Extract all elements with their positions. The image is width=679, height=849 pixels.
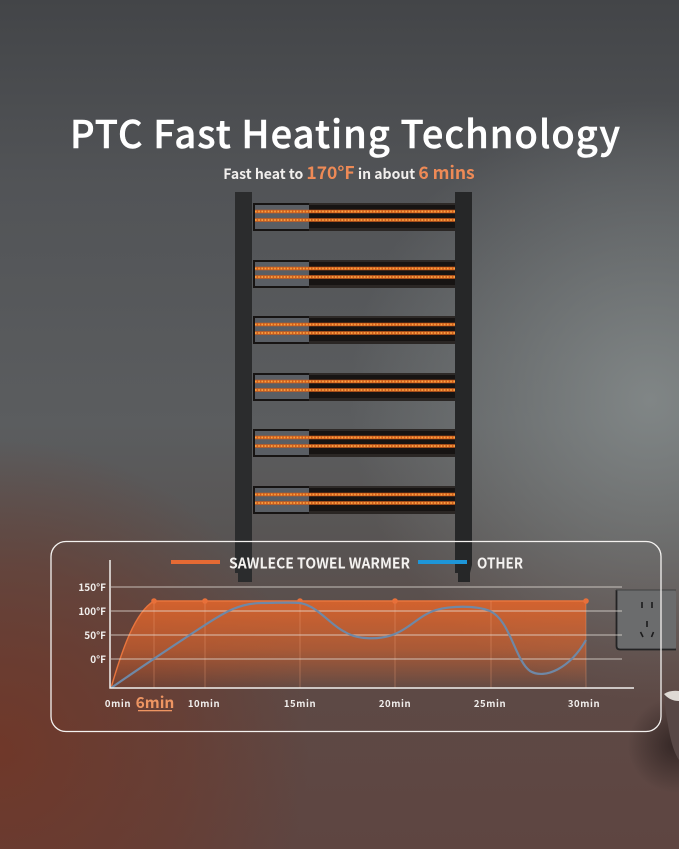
y axis labels: 0°F — [90, 651, 106, 666]
axes — [110, 560, 634, 688]
legend: other — [418, 552, 523, 574]
x axis labels: 30min — [568, 696, 600, 710]
blue line: other — [111, 603, 586, 688]
heated bar 4 — [253, 373, 455, 401]
heated bar 5 — [253, 429, 455, 457]
heated bar 3 — [253, 316, 455, 344]
legend: other: OTHER — [477, 552, 523, 574]
y axis labels: 50°F — [84, 627, 106, 642]
y axis labels — [78, 579, 106, 666]
x axis labels: 10min — [188, 696, 220, 710]
legend: sawlece towel warmer: SAWLECE TOWEL WARMER — [229, 552, 410, 574]
y axis labels: 100°F — [78, 603, 106, 618]
line chart — [78, 560, 634, 713]
x axis labels: 0min — [105, 696, 131, 710]
6min highlight: 6min — [136, 691, 174, 713]
icon: wall socket — [616, 590, 676, 650]
orange area — [111, 601, 586, 688]
heated bar 1 — [253, 203, 455, 231]
heated bar 6 — [253, 486, 455, 514]
y axis labels: 150°F — [78, 579, 106, 594]
grid lines — [111, 587, 622, 659]
icon: cup edge — [664, 691, 679, 760]
x axis labels: 15min — [284, 696, 316, 710]
towel warmer rack — [235, 192, 472, 582]
vertical guides — [154, 601, 586, 688]
subtitle: Fast heat to 170°F in about 6 mins — [223, 160, 475, 185]
x axis labels — [105, 696, 600, 710]
left post — [235, 192, 252, 582]
data points — [151, 598, 589, 604]
x axis labels: 25min — [474, 696, 506, 710]
heated bar 2 — [253, 260, 455, 288]
right post — [455, 192, 472, 582]
x axis labels: 20min — [379, 696, 411, 710]
chart panel — [51, 542, 661, 732]
title: PTC Fast Heating Technology — [70, 104, 620, 159]
